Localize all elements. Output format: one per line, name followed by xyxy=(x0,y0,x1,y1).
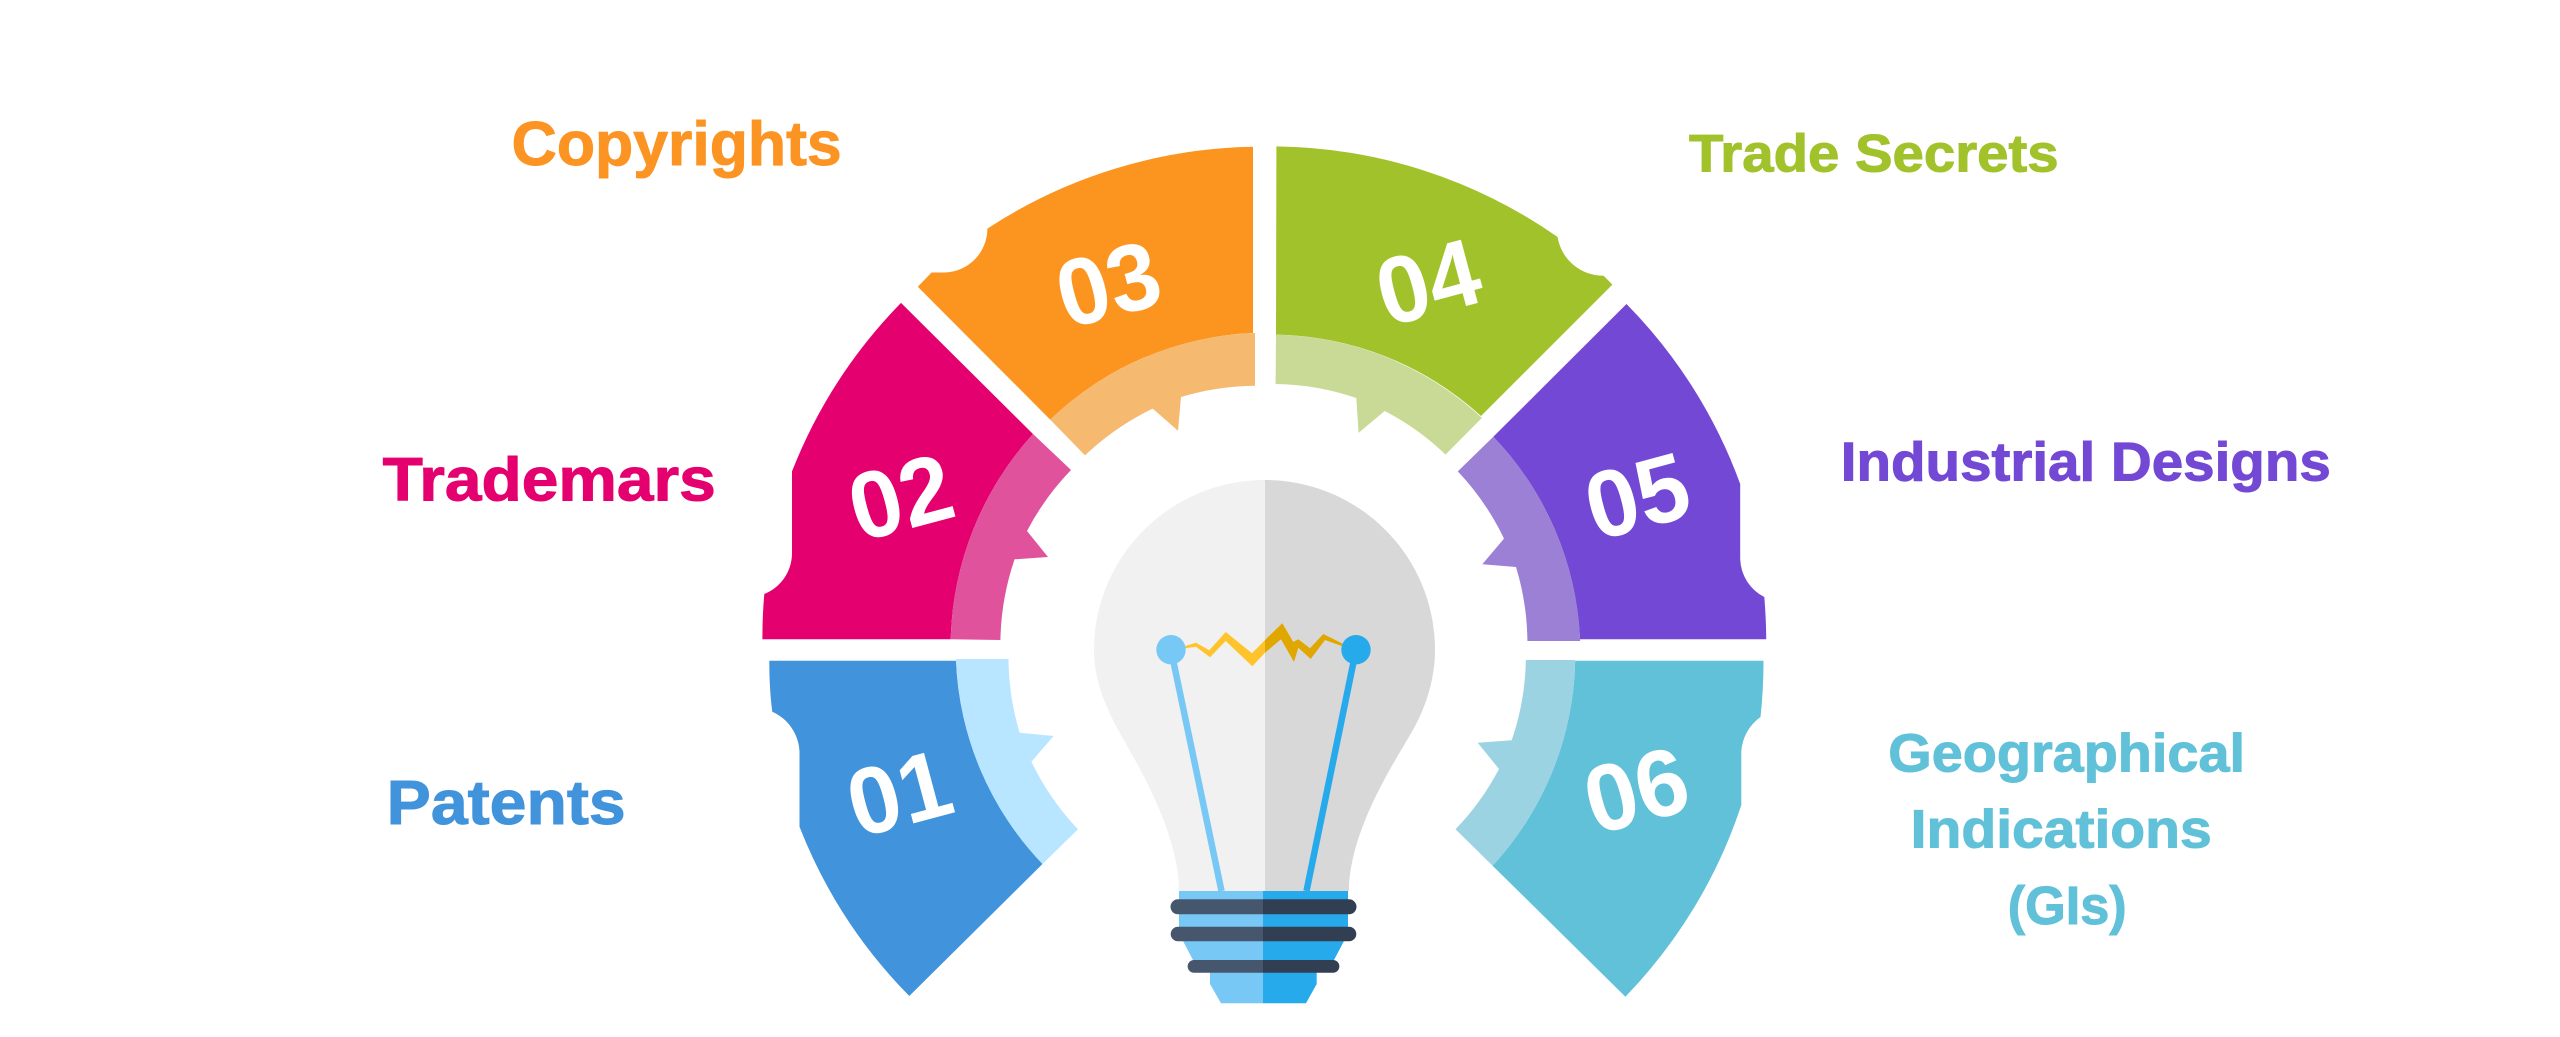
label: Geographical Indications (GIs): Indications xyxy=(1911,800,2212,860)
label: Industrial Designs: Industrial Designs xyxy=(1841,431,2331,493)
label: Geographical Indications (GIs) xyxy=(1888,724,2245,936)
number 01: 01 xyxy=(836,729,963,858)
label: Copyrights: Copyrights xyxy=(512,110,842,179)
bulb glass xyxy=(1094,480,1435,891)
bulb screw base xyxy=(1171,891,1356,1003)
number 03: 03 xyxy=(1045,220,1172,349)
label: Trademars: Trademars xyxy=(383,446,716,514)
number 02: 02 xyxy=(838,433,964,562)
panel: segment 06 geographical indications xyxy=(1456,660,1764,997)
number 06: 06 xyxy=(1573,726,1700,855)
label: Geographical Indications (GIs): Geographical xyxy=(1888,724,2245,784)
panel: segment 05 industrial designs xyxy=(1458,304,1766,641)
number 04: 04 xyxy=(1365,218,1492,347)
number 05: 05 xyxy=(1574,432,1701,561)
icon: light bulb xyxy=(1094,480,1435,1003)
label: Trade Secrets: Trade Secrets xyxy=(1689,125,2059,184)
panel: segment 04 trade secrets xyxy=(1276,146,1612,455)
filament xyxy=(1185,623,1343,666)
wires and contacts xyxy=(1156,635,1371,891)
label: Geographical Indications (GIs): (GIs) xyxy=(2008,876,2127,936)
label: Patents: Patents xyxy=(387,769,626,838)
panel: segment 02 trademarks xyxy=(762,303,1071,640)
panel: segment 03 copyrights xyxy=(918,147,1255,455)
panel: segment 01 patents xyxy=(769,659,1078,996)
